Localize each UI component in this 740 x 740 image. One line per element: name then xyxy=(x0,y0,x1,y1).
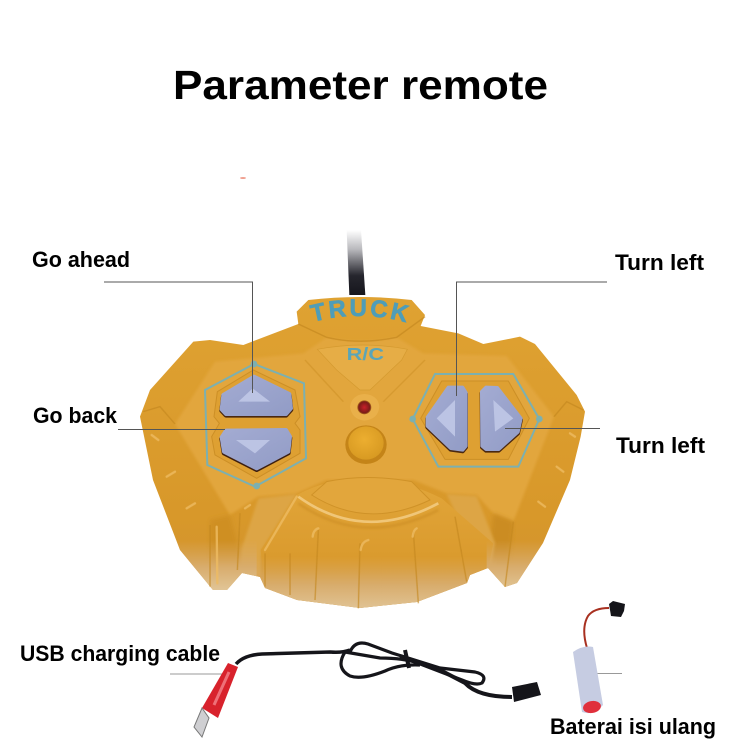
leader: turn left top xyxy=(456,282,607,396)
tie xyxy=(405,650,409,668)
blue outline xyxy=(413,374,539,467)
leader: turn left bottom xyxy=(505,428,600,430)
leader: go ahead xyxy=(104,282,252,393)
LED xyxy=(350,394,379,421)
remote control xyxy=(140,232,588,630)
red usb plug xyxy=(202,663,238,718)
battery end cap xyxy=(582,700,602,714)
leader: go back xyxy=(118,428,225,430)
wing shadows xyxy=(212,518,236,586)
arc highlight xyxy=(298,497,438,522)
battery cell xyxy=(573,647,603,713)
down button xyxy=(222,430,290,470)
label: go ahead: Go ahead xyxy=(32,247,130,272)
usb charging cable xyxy=(194,643,541,737)
connector xyxy=(512,682,541,702)
title: Parameter remote xyxy=(173,62,548,108)
label: turn left bottom: Turn left xyxy=(616,433,706,458)
left button group xyxy=(205,361,306,489)
small red speck xyxy=(240,177,246,179)
cream base xyxy=(256,561,496,608)
button well xyxy=(421,381,529,459)
center top plate xyxy=(312,477,430,514)
R/C label: R/C xyxy=(347,344,385,364)
blue outline xyxy=(205,364,306,487)
battery xyxy=(573,601,625,714)
battery wires xyxy=(584,608,609,648)
cord xyxy=(347,230,365,295)
usb metal tip xyxy=(194,708,209,737)
leader: usb xyxy=(170,673,222,675)
top face xyxy=(175,337,554,522)
remote body xyxy=(140,297,585,608)
TRUCK label: TRUCK xyxy=(309,299,410,323)
body shading xyxy=(170,337,554,613)
label: rechargeable battery: Baterai isi ulang xyxy=(550,714,716,739)
label: turn left top: Turn left xyxy=(615,250,705,275)
side panels beside lobe xyxy=(241,494,297,576)
battery connector xyxy=(609,601,625,617)
button well xyxy=(212,370,300,478)
left arrow button xyxy=(427,387,466,451)
up button xyxy=(222,377,291,415)
round button xyxy=(345,425,387,464)
R/C panel xyxy=(317,345,407,390)
leader lines xyxy=(104,282,622,674)
leader: battery xyxy=(588,672,622,674)
label: usb charging cable: USB charging cable xyxy=(20,641,220,666)
right arrow button xyxy=(482,387,521,451)
right button group xyxy=(409,374,543,467)
black wire xyxy=(236,650,350,664)
rib highlights xyxy=(152,433,575,583)
ridges xyxy=(143,317,583,608)
label: go back: Go back xyxy=(33,403,118,428)
center lobe xyxy=(261,478,493,608)
